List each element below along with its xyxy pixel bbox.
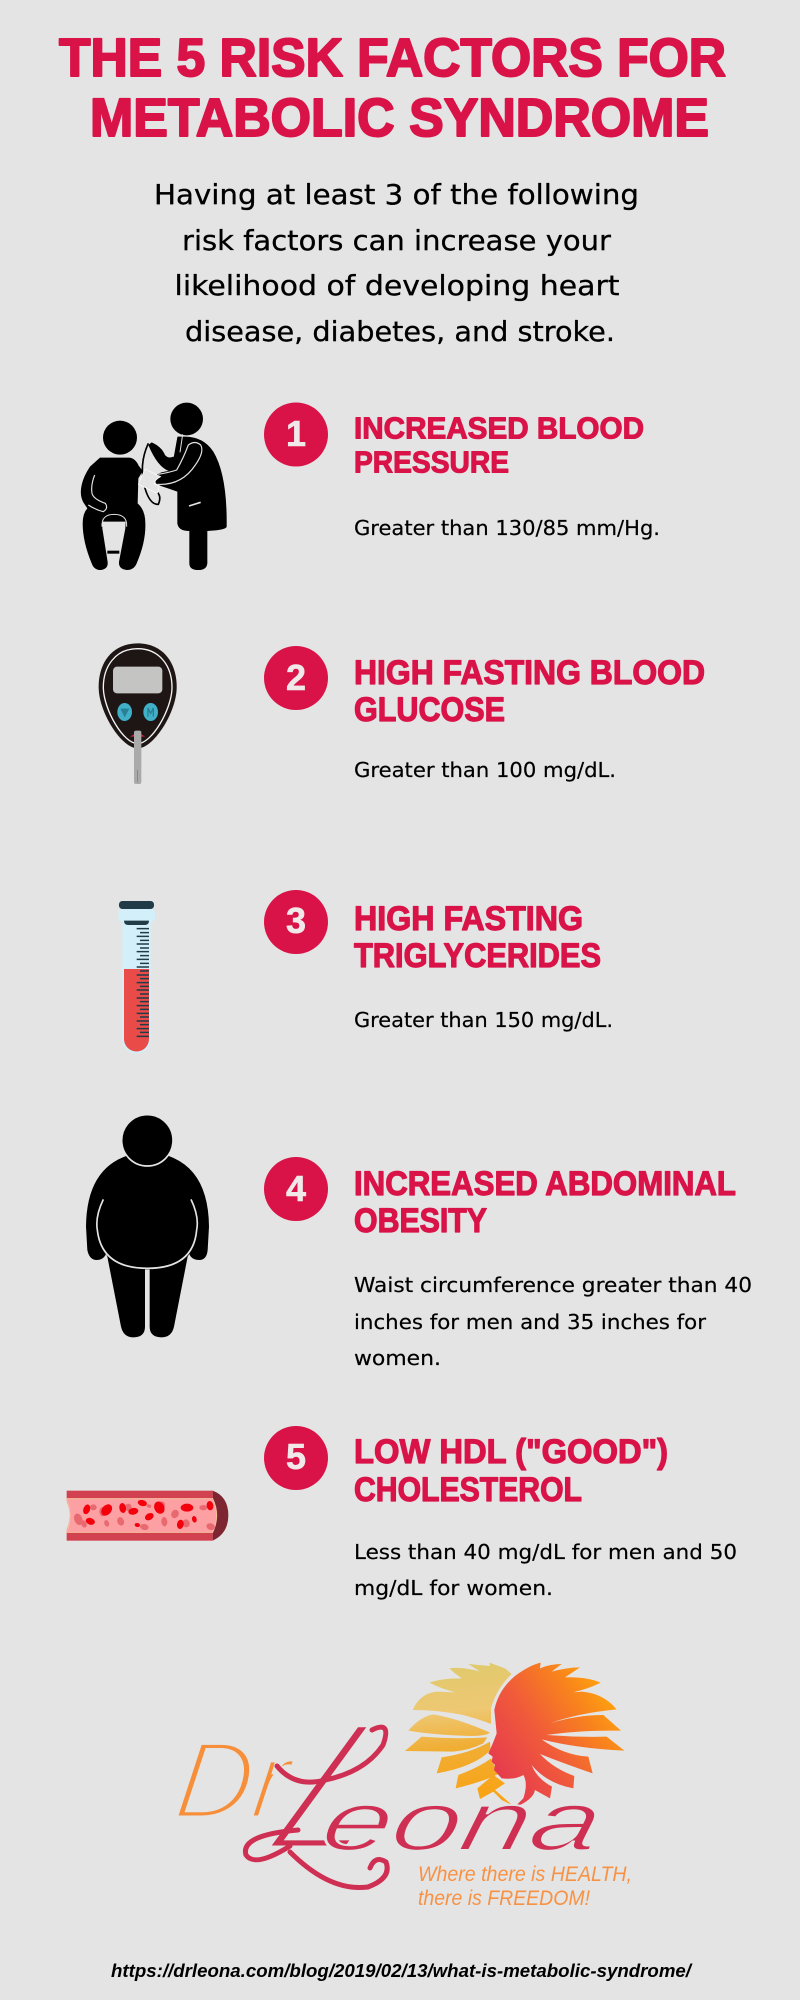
title: THE 5 RISK FACTORS FOR [59, 28, 726, 88]
intro text: likelihood of developing heart [174, 270, 620, 302]
logo: Dr Leona [169, 1663, 632, 1910]
heading 1: PRESSURE [354, 444, 509, 480]
number badge 3: 3 [286, 900, 306, 941]
number badge 4 [264, 1157, 328, 1221]
logo wordmark Leona [237, 1682, 611, 1889]
icon: glucose meter [99, 643, 177, 784]
number badge 3 [264, 890, 328, 954]
heading 4 [354, 1165, 736, 1240]
heading 3: TRIGLYCERIDES [354, 937, 601, 975]
heading 2 [354, 654, 705, 729]
icon: doctor taking blood pressure [81, 403, 227, 570]
icon: blood vessel with red cells [66, 1491, 228, 1541]
logo tagline: Where there is HEALTH, [418, 1863, 632, 1886]
description 3: Greater than 150 mg/dL. [354, 1008, 613, 1032]
icon: blood test tube [118, 901, 155, 1053]
heading 3: HIGH FASTING [354, 900, 583, 938]
panel: risk factor 4, abdominal obesity [86, 1115, 752, 1370]
intro text: risk factors can increase your [182, 225, 612, 257]
logo wordmark Dr: Dr [169, 1719, 302, 1842]
heading 3 [354, 900, 601, 975]
description 4 [354, 1273, 752, 1370]
description 2: Greater than 100 mg/dL. [354, 758, 616, 782]
heading 5 [354, 1433, 668, 1509]
description 1: Greater than 130/85 mm/Hg. [354, 516, 660, 540]
heading 5: LOW HDL ("GOOD") [354, 1433, 668, 1471]
heading 5: CHOLESTEROL [354, 1471, 582, 1509]
title: METABOLIC SYNDROME [90, 88, 709, 148]
intro text: Having at least 3 of the following [154, 179, 639, 211]
logo flourish [245, 1727, 387, 1888]
title [59, 28, 726, 148]
logo wordmark Leona: L [237, 1682, 452, 1889]
logo tagline: there is FREEDOM! [418, 1887, 590, 1910]
description 5 [354, 1540, 737, 1600]
panel: risk factor 1, blood pressure [81, 402, 660, 570]
description 4: inches for men and 35 inches for [354, 1310, 707, 1334]
description 4: Waist circumference greater than 40 [354, 1273, 752, 1297]
panel: risk factor 2, fasting glucose [99, 643, 705, 784]
number badge 1 [264, 402, 328, 466]
heading 2: HIGH FASTING BLOOD [354, 654, 705, 692]
heading 1 [354, 410, 644, 480]
source URL: https://drleona.com/blog/2019/02/13/what-is-metabolic-syndrome/ [111, 1961, 693, 1981]
logo wordmark Leona: eona [314, 1774, 611, 1868]
logo tagline [418, 1863, 632, 1910]
panel: risk factor 3, triglycerides [118, 890, 613, 1053]
heading 1: INCREASED BLOOD [354, 410, 644, 446]
number badge 2 [264, 646, 328, 710]
number badge 5: 5 [286, 1436, 306, 1477]
description 4: women. [354, 1346, 441, 1370]
icon: sunburst woman profile [405, 1663, 624, 1808]
intro text: disease, diabetes, and stroke. [185, 316, 615, 348]
description 5: mg/dL for women. [354, 1576, 553, 1600]
number badge 2: 2 [286, 657, 306, 698]
heading 2: GLUCOSE [354, 691, 505, 729]
number badge 1: 1 [286, 413, 306, 454]
description 5: Less than 40 mg/dL for men and 50 [354, 1540, 737, 1564]
heading 4: INCREASED ABDOMINAL [354, 1165, 736, 1203]
icon: obese figure [86, 1115, 209, 1337]
number badge 4: 4 [286, 1168, 306, 1209]
intro text [154, 179, 639, 348]
number badge 5 [264, 1426, 328, 1490]
panel: risk factor 5, HDL cholesterol [66, 1426, 737, 1600]
heading 4: OBESITY [354, 1202, 487, 1240]
